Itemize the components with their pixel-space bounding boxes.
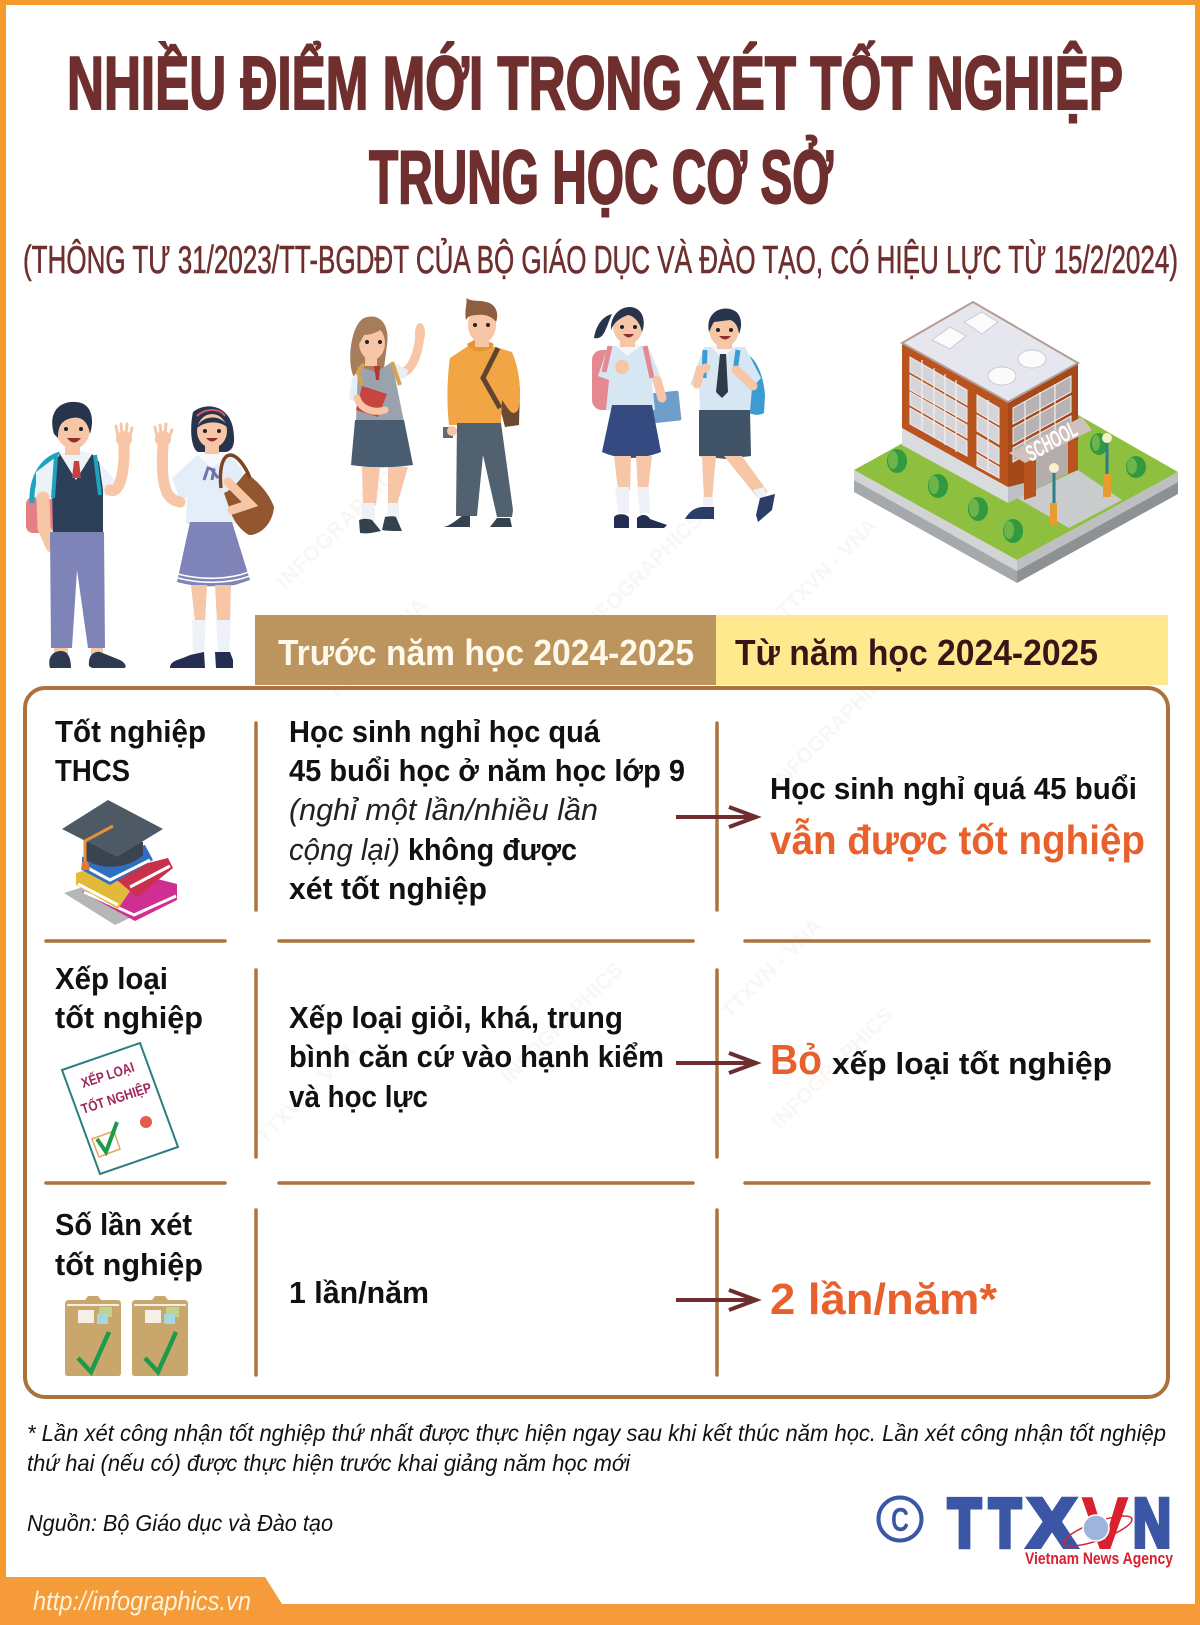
illustration: boy waving with backpack (26, 402, 132, 668)
logo: copyright mark (878, 1498, 922, 1540)
illustration: girl with ponytail and book (592, 307, 681, 528)
text: INFOGRAPHICS (767, 663, 897, 794)
arrow row 2 (676, 1053, 756, 1073)
row 1 after text (770, 771, 1145, 863)
logo: TTXVN: Vietnam News Agency (1025, 1550, 1174, 1568)
title: TRUNG HỌC CƠ SỞ (369, 135, 833, 219)
row 2 before text: Xếp loại giỏi, khá, trung (289, 1000, 623, 1035)
logo: copyright mark: C (891, 1501, 909, 1538)
icon: graduation cap on books (62, 800, 178, 925)
illustration: girl waving with brown bag (155, 406, 274, 668)
row 2 after text: Bỏ (770, 1036, 822, 1083)
logo: TTXVN (948, 1481, 1174, 1568)
row 3 label (55, 1207, 203, 1282)
logo: TTXVN: T (948, 1484, 981, 1562)
footnote: * Lần xét công nhận tốt nghiệp thứ nhất được thực hiện ngay sau khi kết thúc năm học. Lần xét công nhận tốt nghiệp (27, 1420, 1166, 1446)
logo: TTXVN: T (989, 1484, 1021, 1562)
illustration: boy in orange hoodie (443, 298, 520, 527)
row 3 after text: 2 lần/năm* (770, 1275, 998, 1324)
row 1 before text: Học sinh nghỉ học quá (289, 714, 601, 749)
text: INFOGRAPHICS (272, 455, 411, 594)
row 2 after text: xếp loại tốt nghiệp (832, 1046, 1112, 1081)
icon: classification document (62, 1043, 178, 1174)
arrow row 3 (676, 1290, 756, 1310)
table header: before: Trước năm học 2024-2025 (278, 632, 694, 673)
row 2 label: tốt nghiệp (55, 1000, 203, 1035)
row 3 before text: 1 lần/năm (289, 1275, 429, 1310)
row 1 before text: xét tốt nghiệp (289, 871, 487, 906)
logo: TTXVN: V (1081, 1481, 1129, 1565)
illustration: school building: SCHOOL (1020, 416, 1082, 466)
row 1 after text: Học sinh nghỉ quá 45 buổi (770, 771, 1137, 806)
arrow row 1 (676, 807, 756, 827)
text: INFOGRAPHICS (767, 1003, 897, 1134)
illustration: boy with blue backpack (685, 308, 775, 522)
illustration: school building (854, 302, 1178, 583)
row 2 before text: và học lực (289, 1079, 428, 1114)
text: TTXVN - VNA (252, 1039, 362, 1149)
row 2 before text: bình căn cứ vào hạnh kiểm (289, 1039, 664, 1074)
row 1 label (55, 714, 206, 788)
row 2 label (55, 961, 203, 1035)
row 2 after text (770, 1036, 1112, 1083)
row 1 before text: không được (408, 832, 577, 867)
icon: classification document: XẾP LOẠI (79, 1059, 136, 1091)
table header: from (716, 615, 1168, 685)
text: TTXVN - VNA (772, 514, 882, 624)
footnote (27, 1420, 1166, 1476)
icon: two checked envelopes (65, 1296, 188, 1376)
row 1 before text: (nghỉ một lần/nhiều lần (289, 792, 598, 827)
logo: TTXVN: N (1133, 1484, 1171, 1562)
icon: classification document: TỐT NGHIỆP (79, 1078, 153, 1117)
row 1 label: THCS (55, 753, 130, 788)
row 2 before text (289, 1000, 664, 1114)
row 3 label: tốt nghiệp (55, 1247, 203, 1282)
row 1 before text: 45 buổi học ở năm học lớp 9 (289, 753, 685, 788)
footnote: thứ hai (nếu có) được thực hiện trước khai giảng năm học mới (27, 1450, 631, 1476)
text: TTXVN - VNA (717, 914, 827, 1024)
row 1 before text (289, 714, 685, 906)
row 1 after text: vẫn được tốt nghiệp (770, 817, 1145, 863)
footer tab: http://infographics.vn (33, 1586, 251, 1616)
table header: from: Từ năm học 2024-2025 (735, 632, 1098, 673)
text: INFOGRAPHICS (577, 508, 707, 639)
row 1 before text: cộng lại) (289, 832, 400, 867)
row 1 label: Tốt nghiệp (55, 714, 206, 749)
footer tab (0, 1577, 1200, 1625)
title (67, 41, 1123, 219)
table header: before (255, 615, 716, 685)
panel: comparison table (25, 688, 1168, 1397)
row 3 label: Số lần xét (55, 1207, 192, 1242)
logo: TTXVN: X (1028, 1484, 1076, 1562)
row 2 label: Xếp loại (55, 961, 168, 996)
text: TTXVN - VNA (322, 594, 432, 704)
text: INFOGRAPHICS (497, 958, 627, 1089)
source: Nguồn: Bộ Giáo dục và Đào tạo (27, 1510, 333, 1536)
illustration: girl with red book (349, 317, 425, 533)
